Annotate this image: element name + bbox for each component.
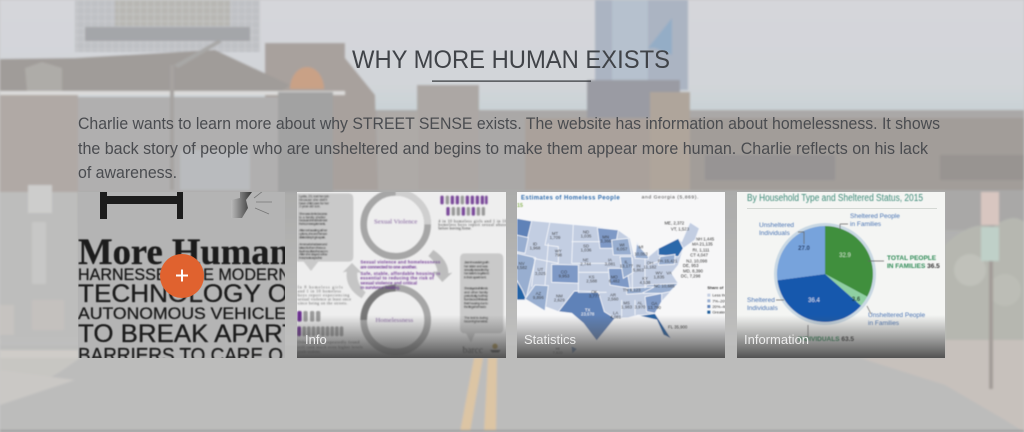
right bubble text: periodically, but they [464, 294, 488, 298]
statistic: top right: 4 in 10 homeless girls and 1 in 10 [438, 218, 507, 223]
state labels: 13,790 [648, 305, 662, 310]
pie labels: Unsheltered [759, 222, 794, 229]
statistic: bottom left: sexual violence at least once [298, 296, 351, 301]
right bubble text: their housing due to [464, 301, 488, 305]
chart heading: By Household Type and Sheltered Status, 2015 [747, 193, 923, 204]
state labels: 1,835 [654, 274, 665, 279]
state labels: VT, 1,523 [671, 227, 690, 232]
state labels: 2,560 [608, 297, 619, 302]
state labels: WI [619, 243, 625, 248]
state labels: AR [610, 293, 616, 298]
statistic: bottom left [297, 284, 363, 354]
left bubble text: talked to them threw a [299, 246, 327, 250]
state labels: KS [589, 274, 595, 279]
state labels: 8,582 [516, 265, 528, 270]
statistic: bottom left: grade students. [298, 349, 321, 354]
left bubble text: few times offered her a room. [299, 249, 328, 253]
left bubble text: She was denied access [299, 212, 328, 216]
infographic content [297, 192, 507, 356]
state labels: 1,968 [530, 246, 541, 251]
left bubble text: A man who had seen and [299, 243, 327, 247]
caption: Info: Info [305, 332, 327, 347]
state labels: MA 21,135 [692, 241, 713, 246]
ring: sexual violence [364, 192, 428, 256]
statistic: top right: homeless boys report sexual abuse [438, 222, 507, 227]
state labels: CT 4,047 [690, 253, 708, 258]
right bubble text: She stayed with friends [464, 287, 488, 291]
state labels: 4,081 [610, 314, 622, 319]
card: Statistics, US map [516, 192, 731, 358]
state labels: 3,025 [535, 271, 546, 276]
bottom gradient [517, 315, 725, 358]
logo: barcc [462, 343, 500, 353]
arrow left [343, 263, 366, 298]
state labels: DE, 953 [683, 263, 699, 268]
state labels: 23,678 [581, 312, 595, 317]
map subheading: and Georgia (5,869). [642, 194, 698, 200]
state labels: 3,970 [635, 304, 646, 309]
icon: bed [100, 192, 183, 219]
state labels: MI [639, 244, 643, 249]
right bubble text: found a couch that was [464, 298, 488, 302]
pie chart: 32.9 [839, 253, 851, 259]
poster headline text [78, 238, 285, 358]
left bubble text [299, 195, 330, 260]
central purple text: to survivors' healing. [360, 285, 400, 290]
state labels: ND [583, 229, 589, 234]
ring: homelessness [364, 288, 428, 352]
state labels: TN 9,123 [623, 288, 641, 293]
pie labels: IN FAMILIES 36.5 [887, 263, 940, 270]
state labels: 3,777 [589, 294, 600, 299]
ring: homelessness: Homelessness [375, 317, 414, 324]
state labels: 1,035 [581, 233, 592, 238]
card: Info, sexual violence and homelessness [297, 192, 507, 358]
poster headline text: TECHNOLOGY OF [78, 280, 304, 308]
state labels: KY [642, 276, 648, 281]
state labels: 6,482 [609, 279, 620, 284]
central purple text: Sexual violence and homelessness [360, 260, 441, 265]
left bubble text: because she didn't [299, 198, 327, 202]
ring: sexual violence: Sexual Violence [374, 219, 417, 226]
statistic: bottom left: still rank much even higher levels [298, 344, 363, 349]
pie chart [774, 223, 876, 325]
bottom gradient [297, 315, 506, 358]
pie labels: Sheltered People [850, 213, 900, 220]
state labels: IA [608, 258, 612, 263]
state labels: IN [636, 263, 641, 268]
state labels: VA [666, 270, 672, 275]
title underline [432, 80, 591, 82]
statistic: bottom left: and 1 in 10 homeless [298, 288, 341, 293]
state labels [516, 220, 715, 329]
state labels: PA 15,421 [658, 258, 678, 263]
state labels: 13,177 [620, 263, 634, 268]
state labels: 2,744 [580, 262, 592, 267]
state labels: CO [561, 269, 568, 274]
state labels: UT [537, 267, 544, 272]
caption: Statistics: Statistics [524, 332, 577, 347]
state labels: MD, 8,390 [683, 268, 704, 273]
state labels: AL [637, 300, 643, 305]
pie labels: Individuals [747, 305, 778, 312]
statistic: bottom left: boys report experiencing [298, 292, 349, 297]
US map [517, 218, 699, 341]
left bubble text: Lydia, 23, lost her job [299, 195, 329, 199]
state labels: AZ [536, 291, 541, 296]
right bubble text: the illegal behavior. [464, 305, 487, 309]
map legend: 7%–20% [712, 298, 729, 303]
poster headline text: AUTONOMOUS VEHICLE [78, 304, 286, 323]
pie labels: Individuals [759, 230, 790, 237]
state labels: NJ, 10,098 [686, 258, 708, 263]
Hawaii inset: HI [556, 346, 560, 351]
intro paragraph: of awareness. [78, 163, 177, 182]
poster headline text: TO BREAK APART [78, 320, 298, 348]
heading rule [747, 208, 937, 209]
card: More Human poster [78, 192, 285, 358]
state labels: NM [556, 294, 563, 299]
state labels: MT [552, 231, 558, 236]
state labels: 9,896 [533, 295, 544, 300]
state labels: MS [623, 300, 630, 305]
intro paragraph [78, 114, 940, 182]
statistic: bottom left: In 8 homeless girls [298, 284, 343, 289]
left speech bubble [297, 193, 353, 271]
right bubble text: Jasmin was living with [464, 261, 489, 265]
Hawaii inset: 7,620 [553, 350, 563, 355]
left bubble text: because she did not meet [299, 219, 327, 223]
pie labels: Unsheltered People [868, 312, 925, 319]
poster headline text: More Human [78, 232, 290, 273]
right bubble text: The test is during [464, 316, 488, 320]
central purple text [360, 260, 441, 290]
state labels: NV [519, 261, 525, 266]
state labels: GA [651, 301, 658, 306]
state labels: ME, 2,372 [664, 220, 685, 225]
map legend: 20%–40% [712, 304, 731, 309]
state labels: 6,057 [617, 247, 628, 252]
card: Information, pie chart [737, 192, 945, 358]
state labels: RI, 1,111 [693, 248, 710, 253]
title: WHY MORE HUMAN EXISTS [352, 46, 670, 74]
state labels: 798 [555, 253, 563, 258]
right speech bubble [460, 253, 503, 343]
right bubble text: her sister and was [464, 264, 488, 268]
pie labels [747, 213, 940, 343]
state labels: ID [533, 242, 537, 247]
right bubble text: and other family [464, 290, 488, 294]
central purple text: sexual violence and critical [360, 280, 417, 285]
state labels: TX [585, 308, 591, 313]
state labels: 1,983 [621, 304, 633, 309]
left bubble text: the income requirements. [299, 222, 326, 226]
state labels: LA [613, 310, 618, 315]
state labels: NH 1,445 [696, 236, 715, 241]
statistic: top right: before leaving home. [438, 226, 472, 231]
pie labels: Sheltered [747, 297, 775, 304]
state labels: 10,053 [634, 252, 648, 257]
state labels: OK [591, 290, 598, 295]
state labels: FL 35,900 [668, 324, 688, 329]
map legend: Less than [712, 293, 730, 298]
pie chart: 36.4 [808, 298, 820, 304]
state labels: WV [656, 270, 663, 275]
caption: Information: Information [744, 332, 809, 347]
right bubble text [464, 261, 489, 324]
map heading: Estimates of Homeless People [521, 195, 620, 201]
arrow right [428, 250, 452, 282]
right bubble text: becoming homeless. [464, 320, 488, 324]
map legend [706, 286, 725, 314]
intro paragraph: Charlie wants to learn more about why STREET SENSE exists. The website has information about homelessness. It shows [78, 114, 940, 133]
right bubble text: sexually assaulted by [464, 268, 489, 272]
state labels: 1,036 [581, 248, 592, 253]
state labels: 3,081 [605, 262, 616, 267]
left bubble text: After exhausting all her [299, 229, 328, 233]
state labels: DC, 7,298 [681, 274, 701, 279]
bottom gradient [737, 315, 945, 358]
state labels: 2,588 [586, 278, 598, 283]
state labels: 1,709 [550, 235, 561, 240]
Hawaii inset [554, 346, 576, 354]
orange plus button [160, 254, 204, 298]
statistic: bottom left: Other studies repeatedly found [298, 340, 359, 345]
left bubble text: have child care for her [299, 201, 330, 205]
poster headline text: HARNESSES THE MODERN [78, 265, 290, 284]
poster headline text: BARRIERS TO CARE O [78, 345, 283, 367]
state labels: SD [583, 244, 589, 249]
left bubble text: started sleeping in a park. [299, 235, 326, 239]
map legend: Greater [712, 310, 727, 315]
state labels: NC 10,685 [654, 284, 675, 289]
map content [516, 194, 731, 355]
state labels: NE [583, 258, 589, 263]
pie labels: in Families [868, 320, 900, 327]
left bubble text: After she stayed a few [299, 253, 328, 257]
statistic: top right [438, 196, 507, 231]
state labels: WY [555, 249, 562, 254]
central purple text: are connected to one another. [360, 264, 417, 269]
central purple text: essential to reducing the risk of [360, 276, 434, 281]
state labels: OH [647, 260, 653, 265]
icon: speaker [231, 191, 272, 218]
state labels: 4,538 [640, 280, 651, 285]
pie chart: 27.0 [798, 246, 810, 252]
state labels: 3,366 [600, 238, 612, 243]
state labels: 9,953 [559, 273, 570, 278]
pie labels: TOTAL PEOPLE [887, 255, 937, 262]
pie chart: 3.6 [852, 297, 861, 303]
right bubble text: in their apartment. [464, 275, 487, 279]
right bubble text: her sister's boyfriend [464, 272, 489, 276]
left bubble text: to a family shelter [299, 215, 326, 219]
pie labels: in Families [850, 221, 882, 228]
state labels: 5,863 [633, 267, 644, 272]
map legend: Share of [707, 285, 724, 290]
state labels: 2,629 [554, 298, 565, 303]
left bubble text: 2-year-old son. [299, 205, 321, 209]
intro paragraph: the back story of people who are unsheltered and begins to make them appear more human. Charlie reflects on his lack [78, 139, 928, 158]
left bubble text: times, he also raped her. [299, 256, 323, 260]
central purple text: Safe, stable, affordable housing is [360, 271, 441, 276]
statistic: bottom left: since being on the streets. [298, 300, 348, 305]
pie labels: INDIVIDUALS 63.5 [798, 336, 854, 343]
state labels: 11,182 [644, 264, 657, 269]
state labels: MO [611, 275, 618, 280]
year fragment: 15 [517, 203, 523, 209]
state labels: MN [602, 234, 609, 239]
logo: barcc: barcc [463, 346, 483, 356]
left bubble text: options, she and her son [299, 232, 327, 236]
state labels: IL [625, 259, 629, 264]
